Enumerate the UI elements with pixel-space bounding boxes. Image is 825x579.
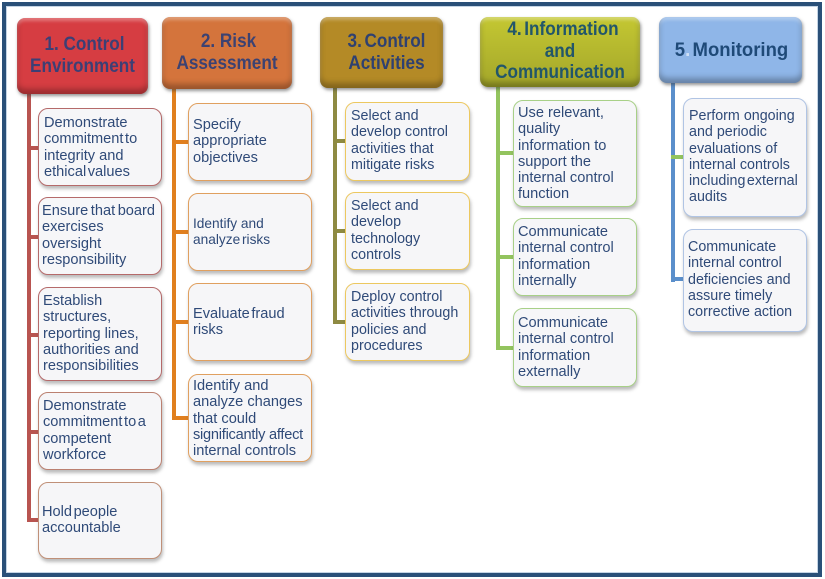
box: ongoing evaluations: audits [689, 189, 727, 205]
box: identify risks [188, 193, 312, 271]
box: communicate deficiencies: corrective action [688, 304, 792, 320]
box: communicate externally: information [518, 348, 590, 364]
heading: 4. Information and Communication [480, 17, 640, 87]
box: specify objectives: Specify [193, 117, 241, 133]
box: use relevant information: quality [518, 121, 560, 137]
box: communicate deficiencies [683, 229, 807, 332]
box: use relevant information: information to [518, 138, 606, 154]
box: board oversight: oversight [42, 236, 101, 252]
box: commitment to integrity: Demonstrate [44, 115, 128, 131]
box: board oversight: responsibility [42, 252, 126, 268]
heading: 4. Information and Communication: Communication [495, 61, 625, 83]
box: deploy through policies [345, 283, 470, 361]
box: technology controls: controls [351, 247, 401, 263]
heading: 1. Control Environment [17, 18, 148, 94]
box: commitment to integrity [38, 108, 162, 186]
box: competent workforce: workforce [43, 447, 106, 463]
box: evaluate fraud risks [188, 283, 312, 361]
box: select control activities: activities that [351, 141, 434, 157]
box: communicate deficiencies: internal control [688, 255, 782, 271]
box: communicate externally [513, 308, 637, 387]
box: competent workforce [38, 392, 162, 470]
box: communicate internally: Communicate [518, 224, 608, 240]
box: structures and reporting lines: structures, [43, 309, 111, 325]
box: structures and reporting lines: authorities and [43, 342, 139, 358]
box: use relevant information: function [518, 186, 569, 202]
box: deploy through policies: procedures [351, 338, 423, 354]
heading: 2. Risk Assessment [162, 17, 292, 89]
box: specify objectives: objectives [193, 150, 258, 166]
box: commitment to integrity: ethical values [44, 164, 130, 180]
column 3: control activities [318, 16, 473, 366]
box: hold people accountable [38, 482, 162, 559]
box: communicate internally: information [518, 257, 590, 273]
heading: 2. Risk Assessment: Assessment [176, 52, 278, 74]
box: deploy through policies: policies and [351, 322, 427, 338]
heading: 5. Monitoring [659, 17, 802, 83]
heading: 3. Control Activities [320, 17, 443, 88]
box: structures and reporting lines: reporting lines, [43, 326, 139, 342]
column 4: information and communication [478, 16, 644, 392]
box: technology controls: develop [351, 214, 401, 230]
box: structures and reporting lines [38, 287, 162, 381]
box: communicate internally [513, 218, 637, 296]
box: commitment to integrity: integrity and [44, 148, 124, 164]
box: communicate externally: internal control [518, 331, 614, 347]
box: identify risks: Identify and [193, 216, 264, 231]
box: structures and reporting lines: Establish [43, 293, 102, 309]
box: communicate internally: internally [518, 273, 576, 289]
heading: 1. Control Environment: Environment [30, 55, 135, 77]
box: evaluate fraud risks: Evaluate fraud [193, 306, 285, 322]
column 2: risk assessment [160, 16, 315, 467]
box: hold people accountable: accountable [42, 520, 121, 536]
connector: column 1 [27, 94, 31, 522]
box: select control activities: Select and [351, 108, 419, 124]
heading: 3. Control Activities: 3. Control [348, 30, 425, 52]
box: structures and reporting lines: responsibilities [43, 358, 139, 374]
box: use relevant information: Use relevant, [518, 105, 604, 121]
box: select control activities: develop control [351, 124, 448, 140]
box: analyze changes: internal controls [193, 443, 296, 459]
box: ongoing evaluations: including external [689, 173, 798, 189]
box: communicate internally: internal control [518, 240, 614, 256]
box: analyze changes: that could [193, 411, 256, 427]
box: communicate deficiencies: assure timely [688, 288, 772, 304]
box: analyze changes: analyze changes [193, 394, 303, 410]
connector: column 4 [496, 87, 500, 350]
box: ongoing evaluations: and periodic [689, 124, 767, 140]
box: ongoing evaluations: internal controls [689, 157, 790, 173]
box: communicate deficiencies: deficiencies and [688, 272, 791, 288]
heading: 3. Control Activities: Activities [348, 52, 425, 74]
box: analyze changes: significantly affect [193, 427, 303, 443]
heading: 1. Control Environment: 1. Control [44, 33, 125, 55]
box: technology controls [345, 192, 470, 270]
box: ongoing evaluations [683, 98, 807, 217]
box: ongoing evaluations: evaluations of [689, 141, 777, 157]
box: board oversight [38, 197, 162, 275]
box: competent workforce: competent [43, 431, 111, 447]
box: use relevant information: internal control [518, 170, 614, 186]
box: evaluate fraud risks: risks [193, 322, 223, 338]
box: identify risks: analyze risks [193, 232, 270, 247]
box: analyze changes [188, 374, 312, 462]
box: specify objectives: appropriate [193, 133, 267, 149]
heading: 2. Risk Assessment: 2. Risk [201, 30, 256, 52]
box: deploy through policies: activities through [351, 305, 458, 321]
box: analyze changes: Identify and [193, 378, 268, 394]
box: deploy through policies: Deploy control [351, 289, 442, 305]
heading: 4. Information and Communication: 4. Information [507, 18, 619, 40]
box: select control activities [345, 102, 470, 181]
box: board oversight: exercises [42, 219, 104, 235]
box: select control activities: mitigate risks [351, 157, 434, 173]
box: competent workforce: Demonstrate [43, 398, 127, 414]
box: specify objectives [188, 103, 312, 181]
box: communicate externally: externally [518, 364, 580, 380]
box: technology controls: technology [351, 231, 420, 247]
box: ongoing evaluations: Perform ongoing [689, 108, 795, 124]
box: board oversight: Ensure that board [42, 203, 155, 219]
box: use relevant information: support the [518, 154, 591, 170]
connector: column 5 [671, 83, 675, 282]
box: competent workforce: commitment to a [43, 414, 146, 430]
box: technology controls: Select and [351, 198, 419, 214]
box: communicate externally: Communicate [518, 315, 608, 331]
box: use relevant information [513, 100, 637, 207]
heading: 4. Information and Communication: and [545, 40, 575, 62]
connector: column 3 [333, 88, 337, 324]
box: commitment to integrity: commitment to [44, 131, 137, 147]
column 5: monitoring [658, 16, 810, 337]
box: communicate deficiencies: Communicate [688, 239, 776, 255]
column 1: control environment [16, 18, 165, 564]
heading: 5. Monitoring: 5. Monitoring [675, 39, 788, 61]
box: hold people accountable: Hold people [42, 504, 117, 520]
connector: column 2 [172, 89, 176, 420]
